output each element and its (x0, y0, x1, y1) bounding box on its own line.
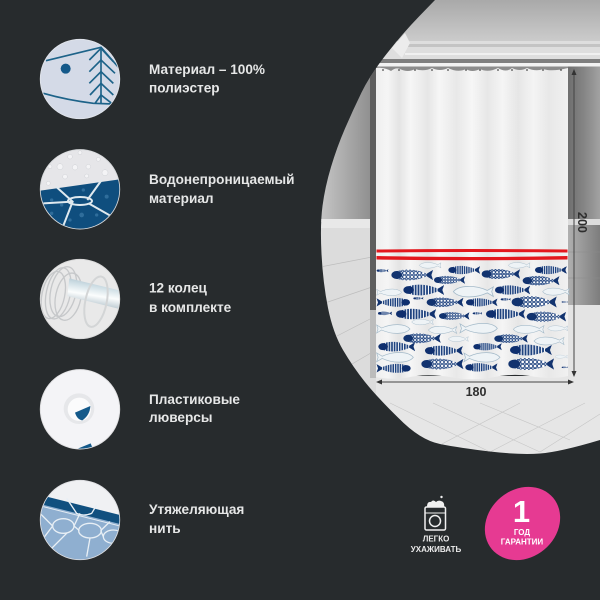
warranty number: 1 (513, 494, 530, 529)
icon: curtain rings on rod (37, 259, 121, 339)
floor (376, 305, 600, 466)
dimension arrow: height (572, 69, 576, 377)
wall behind curtain top (372, 64, 568, 74)
icon: plastic grommet (40, 370, 120, 450)
fish pattern (377, 262, 569, 373)
text: material: Материал – 100% (149, 62, 265, 77)
text: easy care: УХАЖИВАТЬ (411, 545, 461, 554)
badge: warranty (470, 472, 575, 575)
ceiling (396, 0, 600, 43)
icon: washing machine (425, 496, 446, 530)
back wall left (320, 62, 372, 222)
icon: waterproof fabric with droplets (40, 150, 120, 230)
curtain rod (377, 63, 600, 66)
text: rings: 12 колец (149, 280, 208, 296)
text: grommets: люверсы (149, 410, 212, 425)
shower frame (370, 64, 376, 378)
warranty text: ГАРАНТИИ (501, 538, 543, 546)
warranty text: ГОД (514, 528, 530, 537)
lower wall left (320, 219, 376, 403)
text: waterproof: материал (149, 191, 214, 206)
text: easy care: ЛЕГКО (423, 534, 449, 544)
lower wall right (568, 219, 600, 306)
grommets (382, 69, 562, 71)
red stripes (376, 249, 568, 260)
crown molding (379, 33, 600, 64)
text: weighted thread: Утяжеляющая (149, 502, 244, 517)
icon: weighted hem thread (40, 480, 123, 563)
text: material: полиэстер (149, 80, 220, 96)
photo: bathroom with shower curtain (320, 0, 600, 466)
curtain fabric (376, 68, 568, 379)
curtain (376, 68, 569, 379)
dimension arrow: width (376, 380, 574, 384)
text: weighted thread: нить (149, 521, 181, 536)
text: waterproof: Водонепроницаемый (149, 172, 295, 187)
text: rings: в комплекте (149, 300, 232, 315)
icon: fabric material swatch (40, 39, 120, 119)
label: 200: 200 (575, 212, 589, 233)
back wall right (568, 64, 600, 224)
label: 180: 180 (466, 385, 486, 399)
text: grommets: Пластиковые (149, 392, 240, 407)
